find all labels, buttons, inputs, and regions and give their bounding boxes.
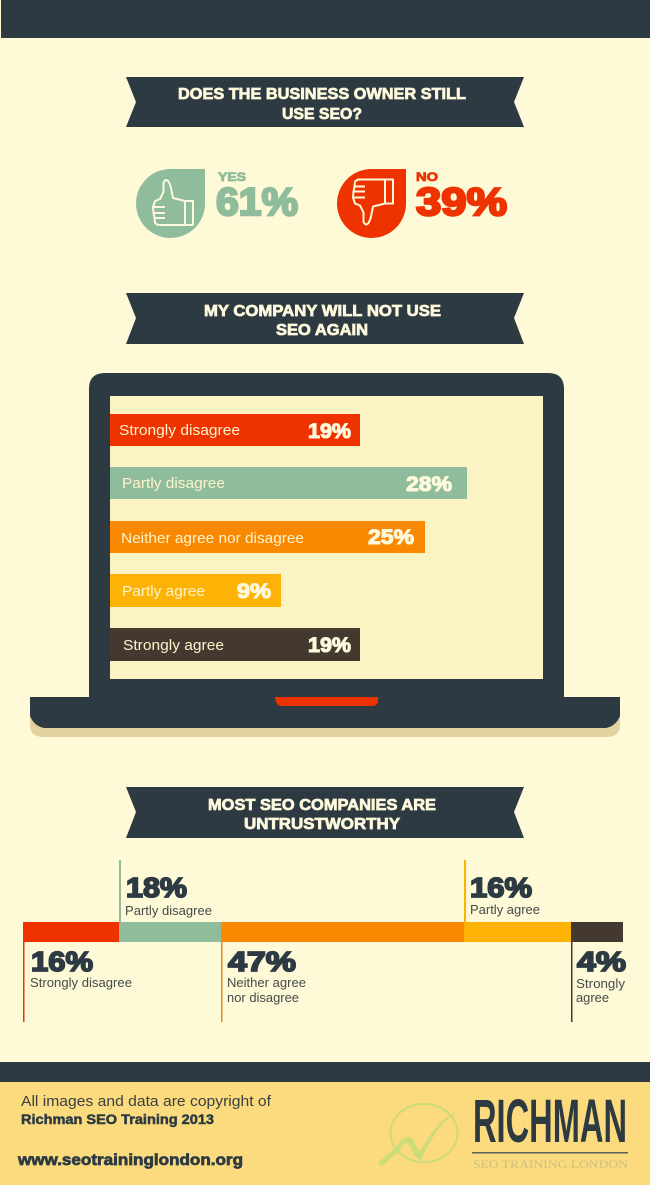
icon: thumbs down	[337, 169, 406, 238]
segment: strongly disagree 16%: Strongly disagree	[30, 976, 132, 990]
icon: thumbs up	[136, 169, 205, 238]
laptop lid	[89, 373, 564, 700]
footer	[0, 1082, 650, 1185]
copyright text: Richman SEO Training 2013	[21, 1112, 215, 1127]
bar: neither agree nor disagree 25%: Neither agree nor disagree	[121, 530, 304, 547]
laptop base	[30, 697, 620, 728]
segment: partly disagree 18%: Partly disagree	[125, 904, 212, 918]
bar: partly disagree 28%	[110, 467, 467, 499]
logo icon: check mark in circle	[378, 1104, 461, 1166]
segment: partly agree 16%: 16%	[470, 872, 532, 903]
heading ribbon: does the business owner still use SEO: USE SEO?	[282, 106, 362, 123]
laptop notch	[275, 697, 378, 706]
heading ribbon: my company will not use SEO again: SEO AGAIN	[276, 322, 368, 339]
segment: neither agree nor disagree 47%: nor disagree	[227, 991, 299, 1005]
bar: neither agree nor disagree 25%: 25%	[368, 526, 414, 549]
laptop bar chart	[30, 373, 620, 737]
stat: yes 61%: 61%	[216, 181, 298, 224]
bar: strongly disagree 19%	[110, 414, 360, 446]
heading ribbon: most SEO companies are untrustworthy: MOST SEO COMPANIES ARE	[208, 797, 436, 814]
heading ribbon: my company will not use SEO again: MY COMPANY WILL NOT USE	[204, 303, 441, 320]
segment: strongly disagree 16%	[23, 942, 132, 1022]
bar: neither agree nor disagree 25%	[110, 521, 425, 553]
heading ribbon: my company will not use SEO again	[126, 293, 524, 344]
stat: yes 61%: YES	[218, 170, 246, 184]
section: does the business owner still use SEO	[126, 77, 524, 238]
bar: strongly agree 19%: 19%	[308, 634, 351, 657]
segment: strongly disagree 16%: 16%	[31, 946, 93, 977]
bar: partly agree 9%: 9%	[237, 580, 271, 603]
segment: strongly agree 4%: agree	[576, 991, 609, 1005]
segment: strongly agree 4%	[571, 942, 626, 1022]
bar: strongly agree 19%	[110, 628, 360, 661]
segment: neither agree nor disagree 47%: Neither agree	[227, 976, 306, 990]
stat: no 39%: NO	[416, 170, 438, 184]
logo wordmark: SEO TRAINING LONDON	[473, 1159, 629, 1171]
segment: partly disagree 18%: 18%	[126, 872, 187, 903]
copyright text: All images and data are copyright of	[21, 1094, 272, 1110]
website url: www.seotraininglondon.org	[17, 1152, 243, 1169]
laptop base shadow	[30, 710, 620, 737]
bar: strongly disagree 19%: 19%	[308, 420, 351, 443]
top bar	[1, 0, 650, 38]
segment: strongly agree 4%: 4%	[577, 946, 626, 977]
segmented bar chart	[23, 860, 626, 1022]
heading ribbon: most SEO companies are untrustworthy: UNTRUSTWORTHY	[244, 816, 400, 833]
bar: strongly disagree 19%: Strongly disagree	[119, 422, 240, 439]
segment: partly disagree 18%	[119, 860, 212, 922]
copyright text	[21, 1094, 272, 1127]
heading ribbon: most SEO companies are untrustworthy	[126, 787, 524, 838]
segment: partly agree 16%: Partly agree	[470, 903, 540, 917]
stat: no 39%	[416, 170, 507, 224]
stacked bar	[23, 922, 623, 942]
laptop screen	[110, 396, 543, 679]
heading ribbon: does the business owner still use SEO	[126, 77, 524, 127]
heading ribbon: does the business owner still use SEO: DOES THE BUSINESS OWNER STILL	[178, 86, 466, 103]
bar: partly agree 9%	[110, 574, 281, 607]
bar: strongly agree 19%: Strongly agree	[123, 637, 224, 654]
segment: neither agree nor disagree 47%	[221, 942, 306, 1022]
bar: partly agree 9%: Partly agree	[122, 583, 205, 600]
segment: strongly agree 4%: Strongly	[576, 977, 626, 991]
bar: partly disagree 28%: Partly disagree	[122, 475, 225, 492]
footer dark bar	[0, 1062, 650, 1082]
bar: partly disagree 28%: 28%	[406, 473, 452, 496]
segment: neither agree nor disagree 47%: 47%	[228, 946, 296, 977]
segment: partly agree 16%	[464, 860, 540, 922]
stat: no 39%: 39%	[416, 181, 507, 224]
